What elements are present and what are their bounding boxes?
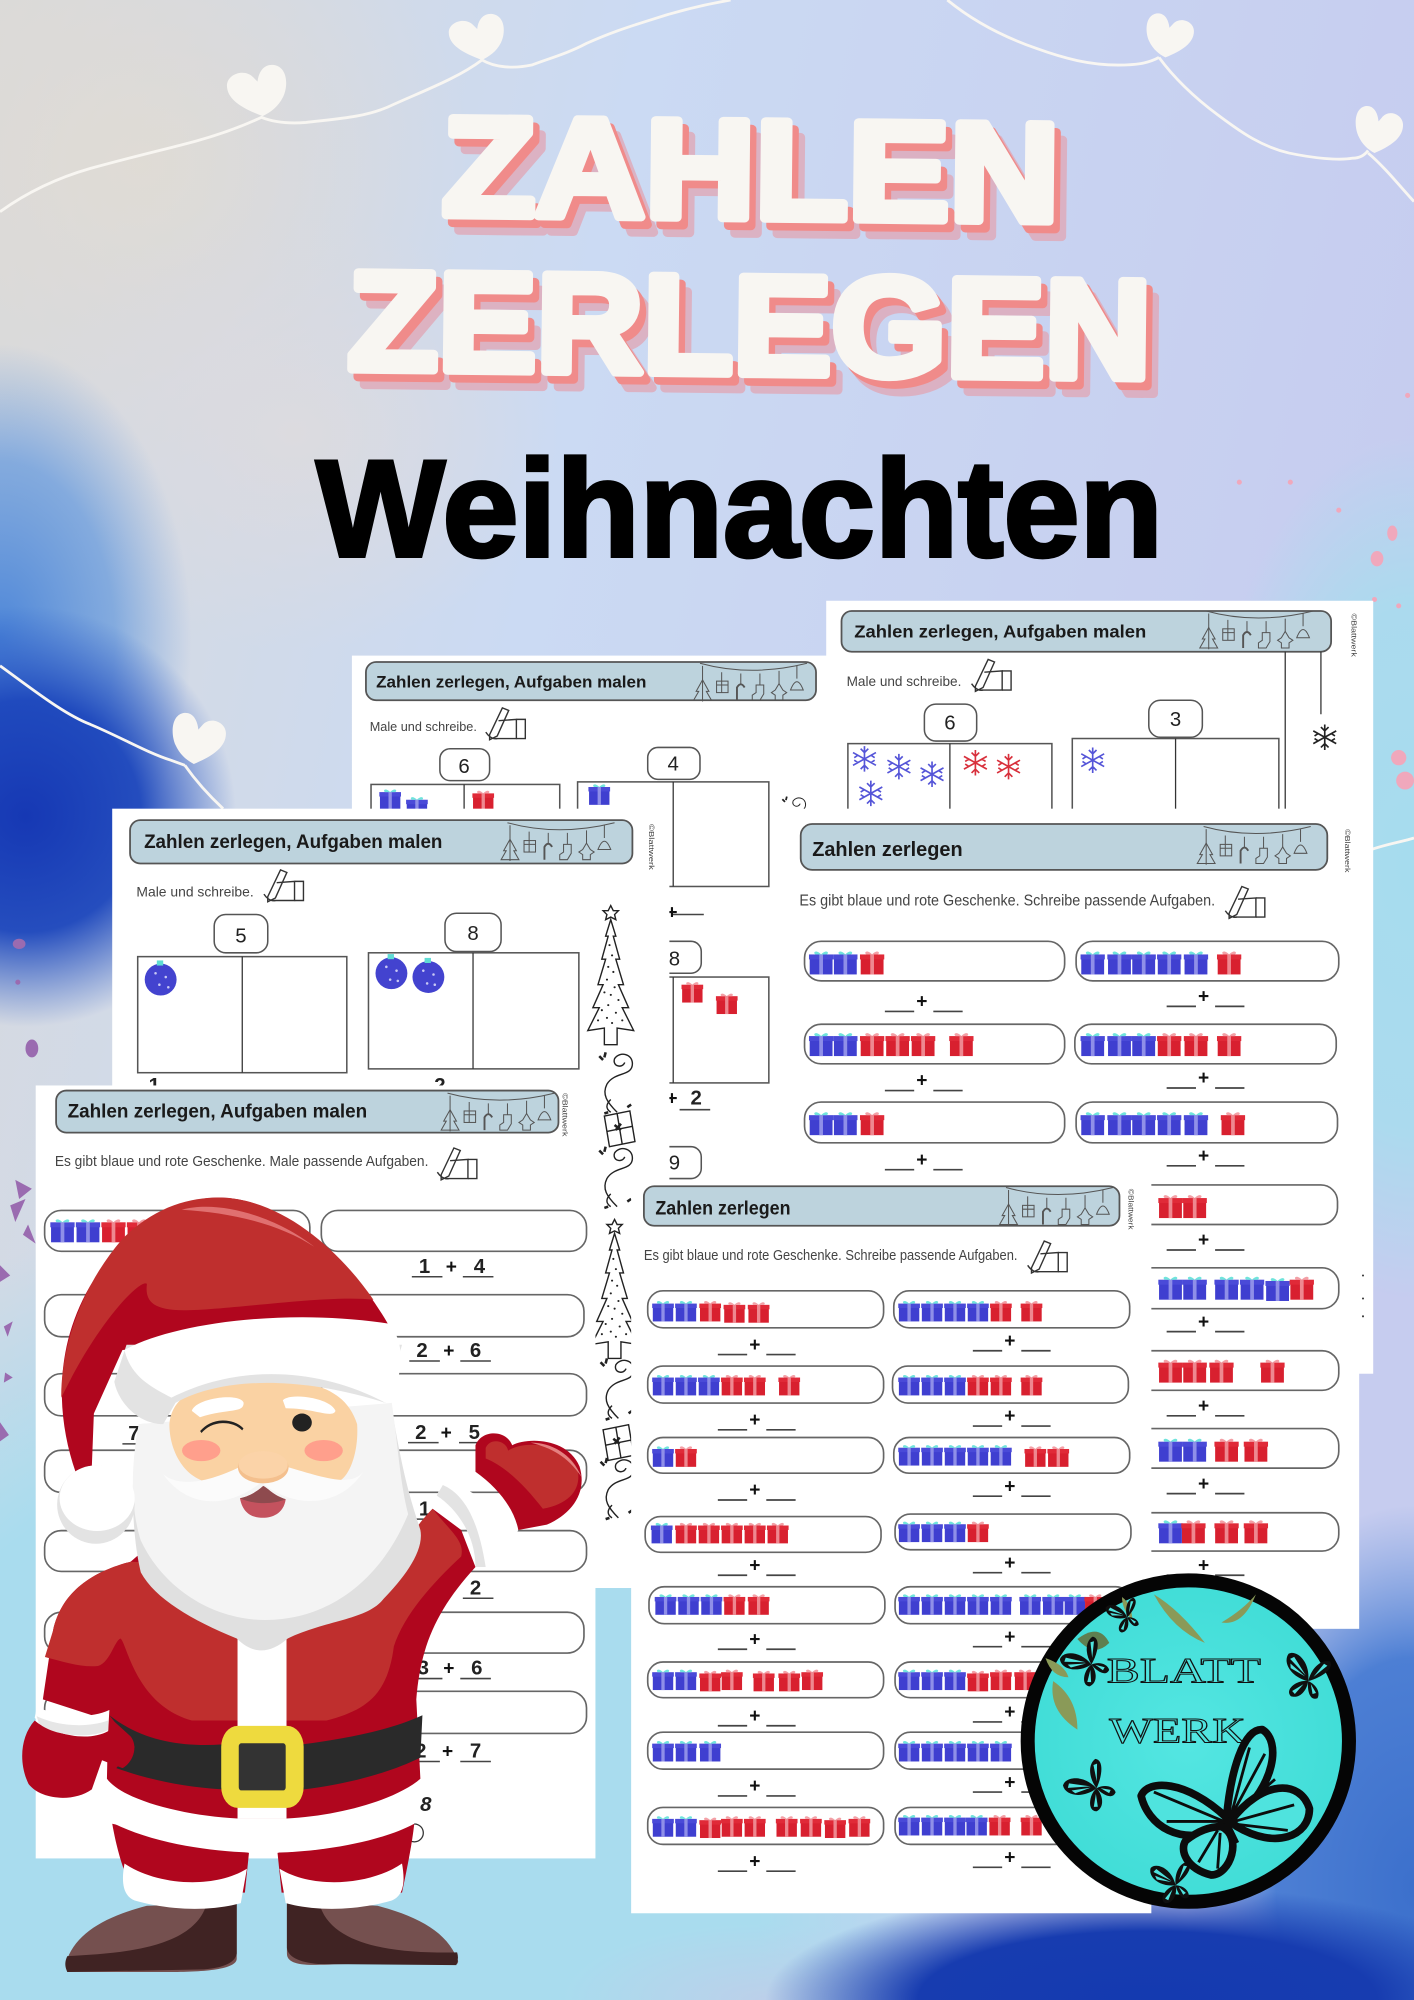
worksheet title: Zahlen zerlegen, Aufgaben malen bbox=[854, 622, 1146, 642]
solved sums: 2 bbox=[415, 1422, 426, 1444]
answer blanks: + bbox=[1004, 1702, 1015, 1723]
face bbox=[163, 1379, 363, 1518]
solved sums: 8 bbox=[420, 1794, 432, 1816]
header bbox=[644, 1186, 1119, 1226]
big butterfly bbox=[1141, 1730, 1309, 1875]
worksheet: top right, snowflakes: ©Blattwerk bbox=[1350, 614, 1359, 657]
header bbox=[801, 824, 1327, 870]
worksheet: top right, snowflakes bbox=[826, 601, 1373, 1374]
title: ZAHLEN ZERLEGEN: ZAHLEN bbox=[442, 88, 1060, 251]
icon: heart 4 bbox=[1356, 106, 1403, 153]
header bbox=[56, 1091, 558, 1133]
left mitten bbox=[22, 1707, 134, 1798]
answer blanks: + bbox=[749, 1851, 760, 1872]
icon: heart 2 bbox=[449, 14, 504, 60]
answer blanks bbox=[885, 987, 1244, 1576]
solved sums: 5 bbox=[469, 1422, 480, 1444]
ornaments bbox=[145, 954, 444, 996]
instruction: Male und schreibe. bbox=[136, 884, 254, 900]
icon: Santa Claus bbox=[22, 1198, 582, 1972]
title: ZAHLEN ZERLEGEN: ZERLEGEN bbox=[360, 258, 1165, 424]
icon: writing hand bbox=[437, 1148, 477, 1180]
answer blanks: + bbox=[1198, 1312, 1209, 1333]
hat bbox=[61, 1198, 388, 1472]
pills bbox=[45, 1210, 587, 1733]
solved sums: 1 bbox=[419, 1256, 430, 1278]
answer blanks: + bbox=[1004, 1331, 1015, 1352]
pill rows bbox=[805, 941, 1339, 1551]
icon: writing hand bbox=[264, 870, 303, 902]
answer blanks: + bbox=[1198, 1396, 1209, 1417]
answer blanks: + bbox=[1004, 1772, 1015, 1793]
worksheet: middle left, ornaments: 1 bbox=[149, 1075, 160, 1097]
answer blanks: + bbox=[1198, 987, 1209, 1008]
beard bbox=[133, 1403, 421, 1650]
answer blanks: + bbox=[749, 1629, 760, 1650]
answer blanks: + bbox=[916, 992, 927, 1013]
answer blanks: + bbox=[916, 1071, 927, 1092]
solved sums: 6 bbox=[470, 1340, 481, 1362]
garland bbox=[441, 1093, 555, 1131]
garland bbox=[1197, 827, 1311, 865]
garland icons bbox=[1200, 611, 1313, 649]
solved sums: + bbox=[441, 1423, 452, 1444]
worksheet: bottom center, Zahlen zerlegen: ©Blattwerk bbox=[1126, 1189, 1135, 1230]
solved sums: 7 bbox=[470, 1741, 481, 1763]
confetti bbox=[0, 393, 1414, 1441]
answer blanks bbox=[718, 1331, 1051, 1872]
solved sums: 2 bbox=[416, 1340, 428, 1362]
instruction: Male und schreibe. bbox=[847, 673, 961, 689]
solved sums: + bbox=[442, 1742, 453, 1763]
answer blanks: + bbox=[1004, 1476, 1015, 1497]
answer blanks: + bbox=[749, 1555, 760, 1576]
worksheet: back, Aufgaben malen with gifts: 2 bbox=[690, 1088, 702, 1110]
answer blanks: + bbox=[1198, 1068, 1209, 1089]
answer blanks: + bbox=[749, 1410, 760, 1431]
title: ZAHLEN ZERLEGEN bbox=[347, 88, 1165, 424]
answer blanks: + bbox=[1198, 1230, 1209, 1251]
answer blanks: + bbox=[1198, 1555, 1209, 1576]
garland bbox=[501, 823, 615, 861]
right mitten bbox=[437, 1433, 582, 1567]
instruction: Es gibt blaue und rote Geschenke. Male passende Aufgaben. bbox=[55, 1154, 428, 1170]
solved sums: 7 bbox=[128, 1423, 140, 1445]
title: ZAHLEN ZERLEGEN: ZERLEGEN bbox=[353, 250, 1158, 416]
worksheet: middle left, ornaments: 5 bbox=[235, 926, 247, 948]
answer blanks: + bbox=[749, 1335, 760, 1356]
worksheet: back, Aufgaben malen with gifts: 8 bbox=[669, 949, 680, 971]
icon: heart 5 bbox=[173, 713, 226, 764]
solved sums: 2 bbox=[415, 1741, 426, 1763]
solved sums: + bbox=[443, 1659, 454, 1680]
leaves bbox=[1046, 1594, 1256, 1730]
worksheet: right, Zahlen zerlegen bbox=[778, 809, 1359, 1629]
pills bbox=[645, 1291, 1131, 1844]
answer blanks: + bbox=[1004, 1553, 1015, 1574]
worksheet: back, Aufgaben malen with gifts: ©Blattwerk bbox=[825, 666, 834, 709]
worksheet: back, Aufgaben malen with gifts: + bbox=[666, 1089, 678, 1110]
small butterflies bbox=[1056, 1598, 1337, 1907]
worksheet: middle left, ornaments bbox=[112, 809, 669, 1588]
belt and buckle bbox=[109, 1715, 422, 1808]
gifts bbox=[809, 952, 1314, 1543]
answer blanks: + bbox=[1198, 1146, 1209, 1167]
worksheet: right, Zahlen zerlegen: ©Blattwerk bbox=[1343, 829, 1352, 873]
worksheet header bbox=[842, 611, 1331, 652]
worksheet: back, Aufgaben malen with gifts: Zahlen zerlegen, Aufgaben malen bbox=[376, 672, 646, 692]
solved sums: 4 bbox=[474, 1256, 486, 1278]
logo text: BLATT bbox=[1107, 1650, 1261, 1690]
worksheet: back, Aufgaben malen with gifts: 6 bbox=[458, 756, 470, 778]
garland bbox=[1000, 1188, 1113, 1226]
icon: writing hand bbox=[1225, 886, 1265, 918]
icon: writing hand bbox=[972, 659, 1011, 691]
boots bbox=[65, 1901, 458, 1972]
answer blanks: + bbox=[1004, 1406, 1015, 1427]
solved sums bbox=[122, 1256, 493, 1842]
solved sums: + bbox=[446, 1257, 457, 1278]
instruction: Es gibt blaue und rote Geschenke. Schreibe passende Aufgaben. bbox=[644, 1248, 1017, 1264]
worksheet: middle left, ornaments: 2 bbox=[434, 1075, 446, 1097]
solved sums: 6 bbox=[471, 1658, 483, 1680]
worksheet: middle left, ornaments: 8 bbox=[467, 923, 479, 945]
icon: writing hand bbox=[1028, 1241, 1067, 1273]
solved sums: 1 bbox=[419, 1498, 430, 1520]
logo: Blatt Werk butterfly badge bbox=[1028, 1580, 1349, 1907]
subtitle: Weihnachten: Weihnachten bbox=[316, 432, 1163, 586]
answer blanks: + bbox=[749, 1706, 760, 1727]
worksheet: top right, snowflakes: 6 bbox=[944, 713, 956, 735]
answer blanks: + bbox=[749, 1480, 760, 1501]
hat band bbox=[114, 1317, 402, 1424]
worksheet: bottom left, solved bbox=[36, 1085, 595, 1858]
solved sums: + bbox=[443, 1341, 454, 1362]
worksheet: back, Aufgaben malen with gifts: Male und schreibe. bbox=[370, 719, 477, 734]
answer blanks: + bbox=[1004, 1848, 1015, 1869]
title: ZAHLEN ZERLEGEN: ZERLEGEN bbox=[347, 242, 1152, 408]
coat hem bbox=[107, 1779, 420, 1853]
title: Zahlen zerlegen bbox=[655, 1198, 791, 1219]
solved sums: 3 bbox=[418, 1658, 429, 1680]
answer blanks: + bbox=[916, 1150, 927, 1171]
worksheet: back, Aufgaben malen with gifts bbox=[352, 656, 834, 1332]
instruction: Es gibt blaue und rote Geschenke. Schreibe passende Aufgaben. bbox=[799, 893, 1215, 910]
worksheet: top right, snowflakes: 3 bbox=[1170, 709, 1181, 731]
worksheet: back, Aufgaben malen with gifts: 4 bbox=[668, 753, 679, 775]
gifts bbox=[651, 1301, 1106, 1838]
solved sums: 2 bbox=[470, 1577, 481, 1599]
number box 8 bbox=[445, 913, 501, 952]
number box 5 bbox=[214, 915, 268, 953]
title: Zahlen zerlegen, Aufgaben malen bbox=[68, 1101, 367, 1122]
icon: heart 1 bbox=[227, 65, 286, 116]
side decorations bbox=[588, 906, 638, 1519]
answer blanks: + bbox=[749, 1776, 760, 1797]
worksheet: middle left, ornaments: ©Blattwerk bbox=[647, 824, 656, 870]
legs bbox=[112, 1824, 414, 1909]
gifts bbox=[50, 1219, 151, 1242]
title: Zahlen zerlegen, Aufgaben malen bbox=[144, 832, 442, 853]
worksheet: back, Aufgaben malen with gifts: 9 bbox=[669, 1153, 680, 1175]
solved sums: + bbox=[443, 1578, 454, 1599]
title: ZAHLEN ZERLEGEN: ZAHLEN bbox=[448, 96, 1067, 259]
worksheet: bottom center, Zahlen zerlegen bbox=[631, 1180, 1151, 1913]
logo text bbox=[1107, 1650, 1261, 1750]
header bbox=[130, 820, 632, 864]
logo text: WERK bbox=[1109, 1710, 1246, 1750]
coat bbox=[43, 1509, 475, 1818]
title: Zahlen zerlegen bbox=[812, 839, 963, 861]
title: ZAHLEN ZERLEGEN: ZAHLEN bbox=[454, 103, 1073, 267]
worksheet: bottom left, solved: ©Blattwerk bbox=[560, 1093, 569, 1137]
pompom bbox=[57, 1465, 135, 1544]
answer blanks: + bbox=[1004, 1627, 1015, 1648]
decorative heart strings bbox=[0, 0, 1414, 852]
answer blanks: + bbox=[1198, 1474, 1209, 1495]
worksheet: back, Aufgaben malen with gifts: + bbox=[666, 902, 678, 923]
icon: heart 3 bbox=[1147, 13, 1194, 57]
